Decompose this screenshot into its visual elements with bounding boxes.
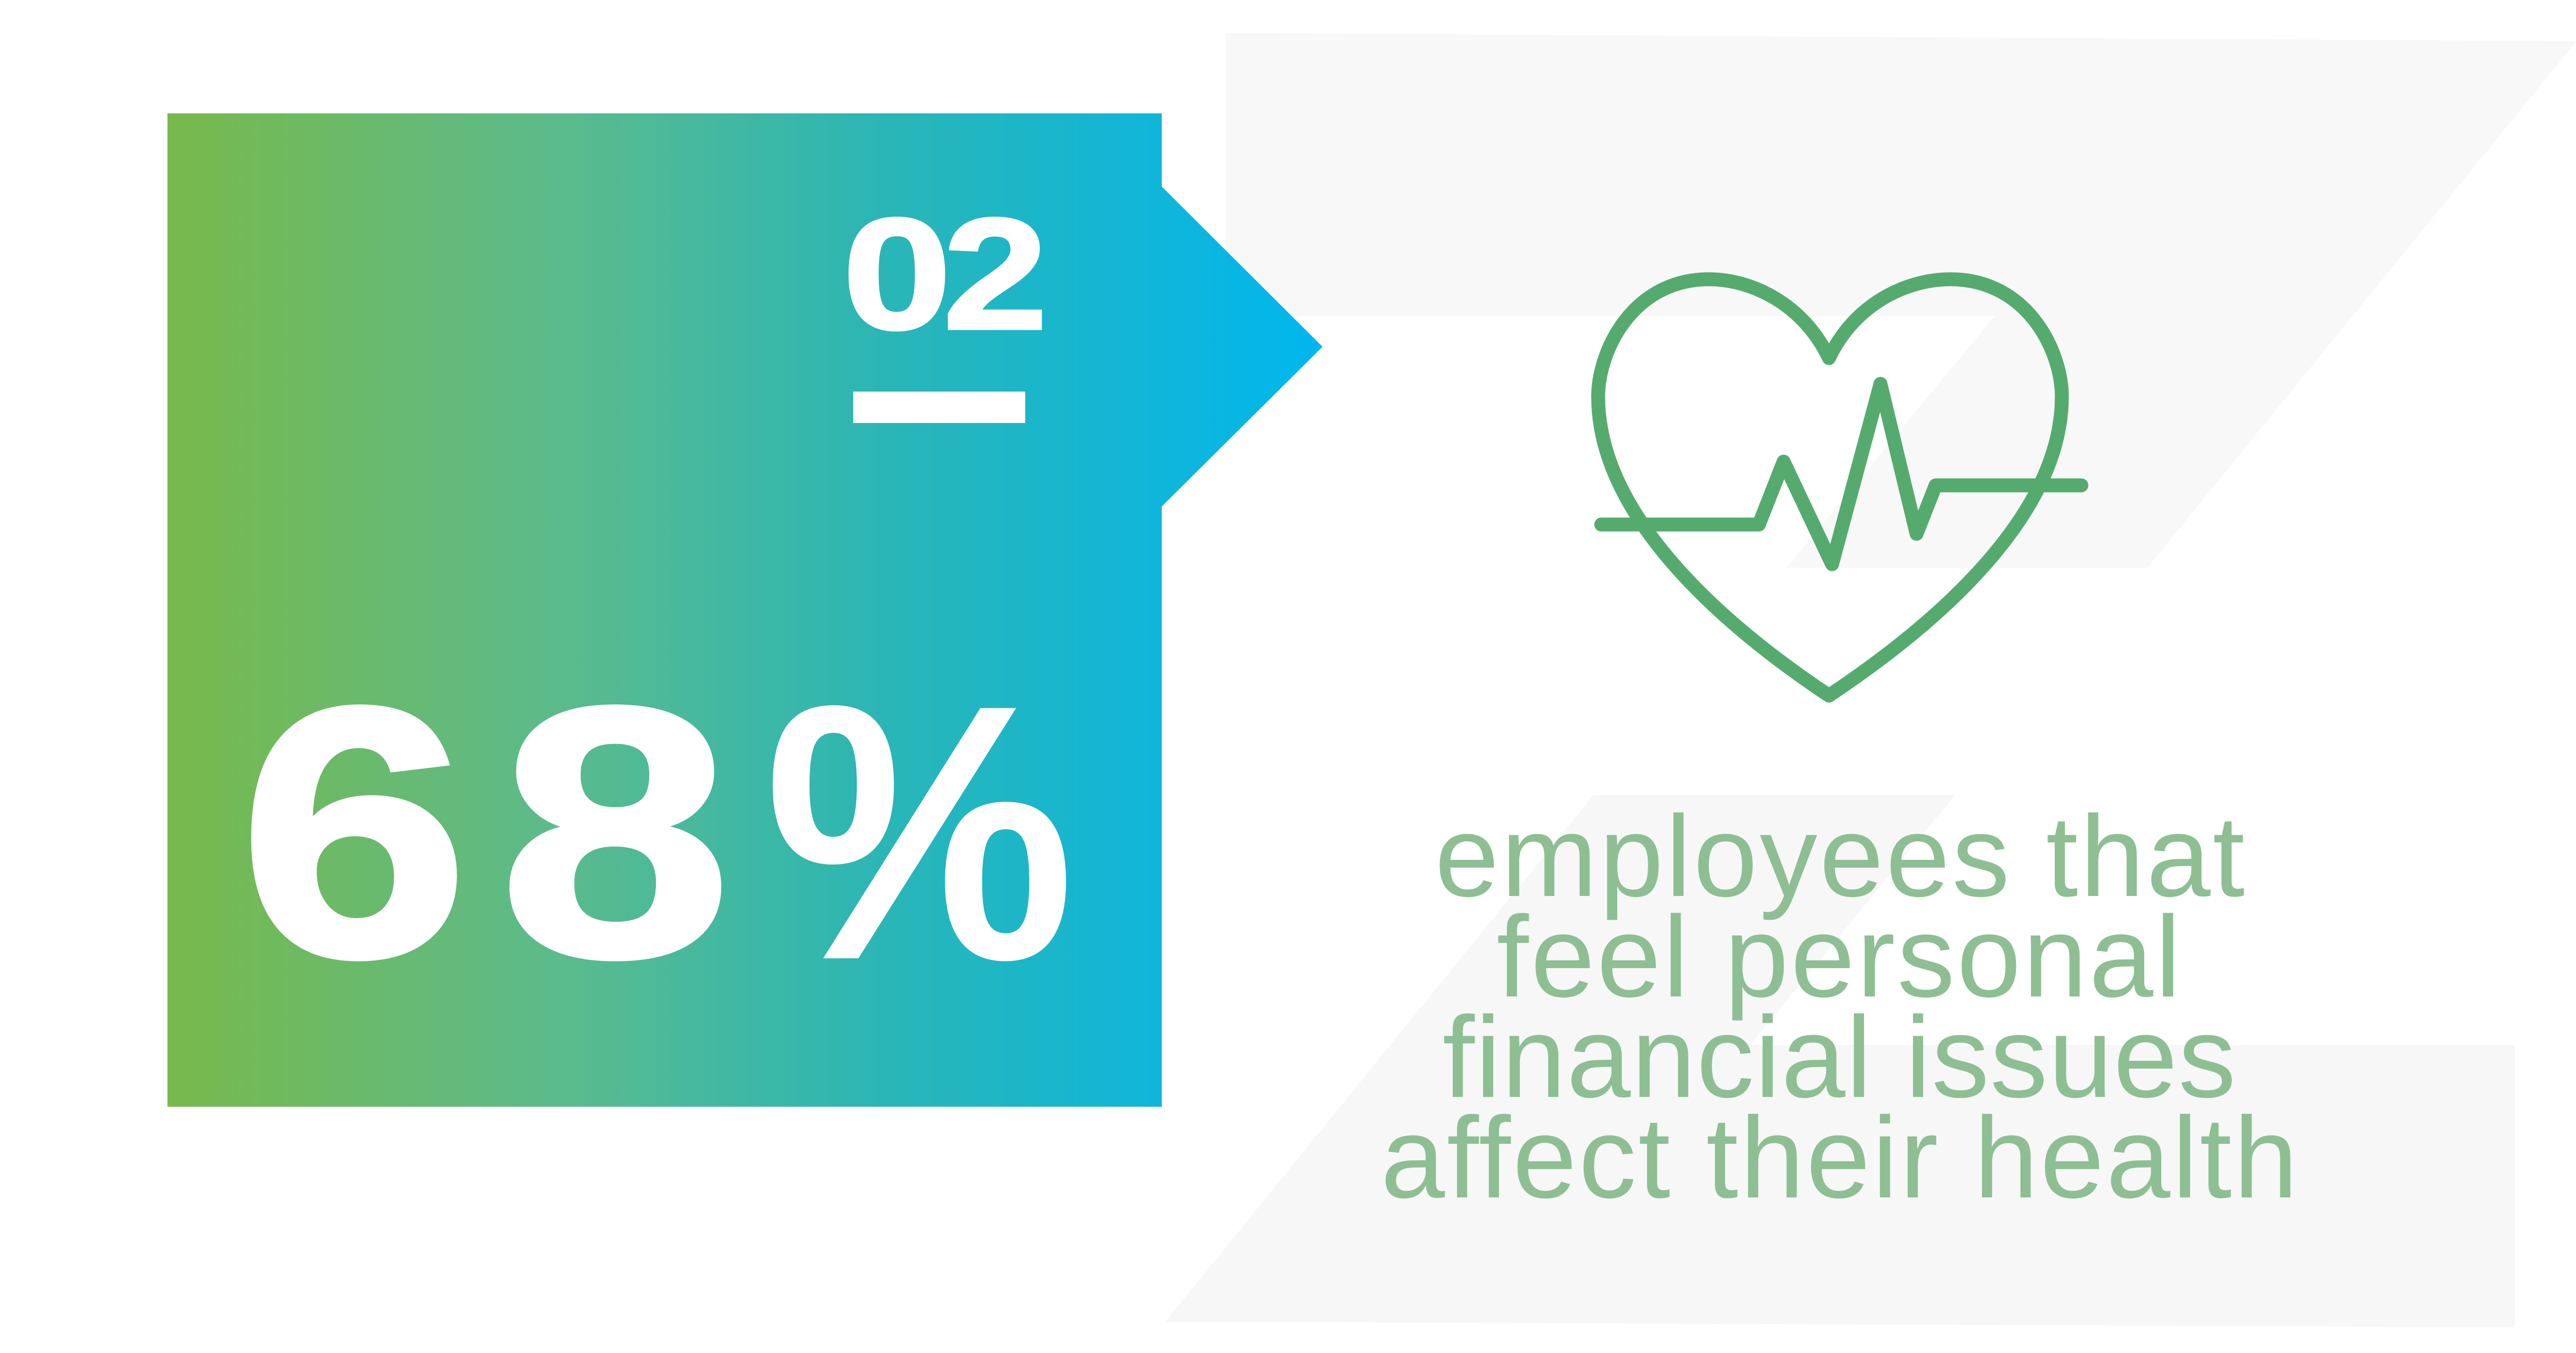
background shape: upper grey Z band — [1226, 33, 2576, 568]
description text: employees that — [1435, 792, 2245, 921]
section number underline bar — [853, 392, 1025, 423]
statistic 68%: 6 — [239, 634, 469, 1031]
heartbeat line — [1601, 384, 2081, 564]
description text — [1381, 792, 2298, 1222]
statistic 68%: 8 — [499, 634, 731, 1031]
description text: financial issues — [1443, 993, 2236, 1122]
section number 02: 2 — [943, 185, 1048, 363]
statistic 68%: % — [764, 629, 1075, 1036]
background shape: lower grey Z band — [1165, 795, 2515, 1327]
description text: affect their health — [1381, 1093, 2298, 1222]
section number 02: 0 — [842, 185, 952, 363]
heart outline — [1598, 279, 2062, 696]
panel: gradient arrow block — [167, 113, 1323, 1107]
section number 02 — [842, 185, 1048, 363]
description text: feel personal — [1497, 892, 2181, 1021]
icon: heart with heartbeat line — [1598, 279, 2081, 696]
statistic 68% — [239, 629, 1075, 1036]
gradient arrow shape — [167, 113, 1323, 1107]
